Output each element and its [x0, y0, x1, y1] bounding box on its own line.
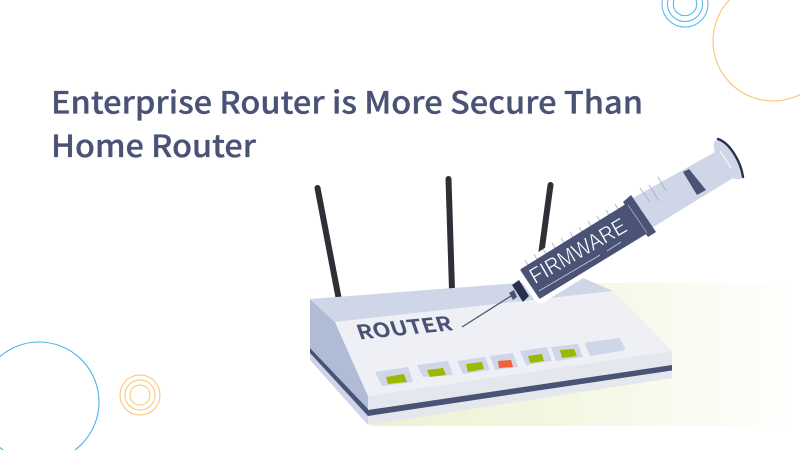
syringe illustration	[462, 139, 743, 327]
router side panel	[310, 299, 368, 410]
antennas	[318, 179, 550, 300]
white halo around syringe body	[520, 203, 646, 298]
needle	[462, 296, 511, 327]
syringe body	[522, 205, 645, 297]
syringe flange	[623, 195, 656, 237]
plunger head dark rim	[718, 139, 743, 177]
plunger head	[714, 139, 743, 179]
decorative circles: bottom left	[0, 342, 160, 450]
decorative circles: top right	[662, 0, 800, 101]
title: Enterprise Router is More Secure Than	[51, 78, 643, 122]
barrel ticks	[525, 177, 666, 265]
router front face	[335, 291, 672, 396]
ROUTER label: ROUTER	[352, 307, 456, 345]
router front lip	[368, 351, 672, 425]
router illustration	[310, 179, 672, 425]
plunger wedge	[683, 169, 706, 195]
router lower side	[310, 348, 368, 425]
dark stripe	[368, 365, 672, 416]
router button	[586, 340, 624, 354]
router top panel	[310, 278, 613, 322]
label underlines	[539, 242, 621, 291]
needle collar	[512, 280, 529, 302]
plunger head highlight	[720, 151, 731, 168]
plunger barrel	[631, 152, 733, 229]
title	[51, 78, 643, 166]
pale green floor glow	[372, 283, 800, 426]
title: Home Router	[51, 122, 257, 166]
needle hub	[509, 290, 517, 300]
FIRMWARE label: FIRMWARE	[525, 213, 631, 289]
status lights	[375, 344, 583, 386]
